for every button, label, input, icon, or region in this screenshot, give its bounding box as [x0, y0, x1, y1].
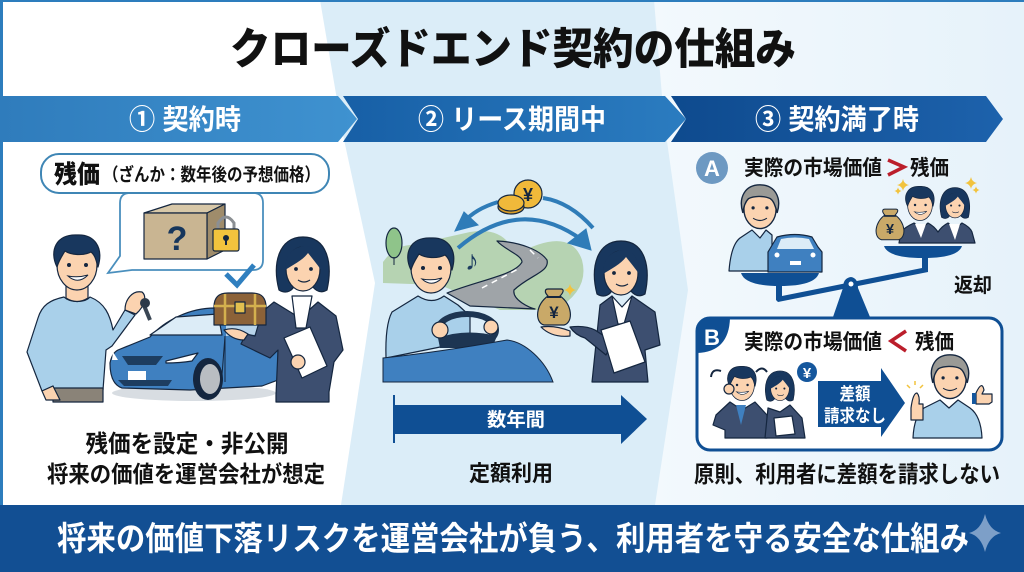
- balance scale: [741, 246, 962, 317]
- driver: [386, 238, 498, 358]
- man with key: [27, 235, 150, 402]
- happy owner: [907, 355, 992, 438]
- caption: set residual: 残価を設定・非公開: [86, 430, 288, 458]
- car: [110, 308, 278, 401]
- case B box: 残価: [915, 330, 954, 354]
- residual value label: （ざんか：数年後の予想価格）: [103, 164, 320, 185]
- worried operators: [711, 362, 817, 438]
- title: クローズドエンド契約の仕組み: [230, 25, 796, 74]
- panel: right background: [654, 0, 1024, 505]
- icon: music note: ♪: [465, 245, 479, 276]
- icon: sparkle: [564, 284, 576, 296]
- case A heading: [696, 152, 949, 184]
- step header 1: [0, 96, 357, 142]
- icon: treasure chest: [214, 293, 266, 325]
- footer banner: [0, 505, 1024, 572]
- icon: mystery box: [144, 204, 225, 259]
- icon: star sparkle: [969, 514, 1001, 552]
- payment arrows: [455, 198, 593, 250]
- icon: money bag: [538, 289, 570, 325]
- icon: mystery box: ?: [167, 220, 187, 258]
- step header 2: ② リース期間中: [418, 104, 606, 135]
- case A heading: A: [704, 156, 720, 181]
- icon: yen coins: [498, 180, 542, 214]
- case A heading: 残価: [910, 156, 949, 180]
- woman agent: [224, 237, 343, 402]
- panel: step 3 end of contract: [694, 152, 1002, 487]
- residual value label: 残価: [54, 160, 100, 189]
- caption: flat-rate use: 定額利用: [469, 461, 553, 486]
- step header 2: [343, 96, 686, 142]
- speech bubble: [108, 193, 263, 273]
- operators with money bag: [876, 177, 980, 243]
- duration arrow: 数年間: [487, 408, 545, 431]
- step header 1: ① 契約時: [129, 104, 241, 135]
- case B box: [697, 318, 1002, 450]
- step header 3: [671, 96, 1003, 142]
- scenery with road: [383, 228, 583, 310]
- residual value label: [41, 154, 329, 193]
- case A heading: 実際の市場価値: [744, 157, 882, 180]
- owner and car: [729, 185, 822, 272]
- duration arrow: [393, 395, 647, 444]
- car hood: [383, 340, 553, 382]
- arrow: no difference billed: [818, 368, 905, 437]
- icon: yen coins: ¥: [523, 185, 533, 205]
- arrow: no difference billed: 請求なし: [824, 406, 886, 426]
- icon: padlock: [213, 217, 239, 251]
- step header 3: ③ 契約満了時: [755, 104, 919, 135]
- caption: operator estimates: 将来の価値を運営会社が想定: [47, 461, 325, 487]
- panel: step 1 contract: [27, 154, 343, 487]
- panel: middle background: [320, 0, 1024, 505]
- case B box: 実際の市場価値: [744, 331, 882, 354]
- worried operators: ¥: [803, 365, 812, 382]
- return label: 返却: [954, 274, 992, 297]
- panel: step 2 lease period: [383, 180, 660, 486]
- icon: check mark: [226, 265, 254, 285]
- woman agent: [541, 241, 660, 382]
- arrow: no difference billed: 差額: [840, 384, 871, 404]
- case B box: B: [704, 325, 720, 350]
